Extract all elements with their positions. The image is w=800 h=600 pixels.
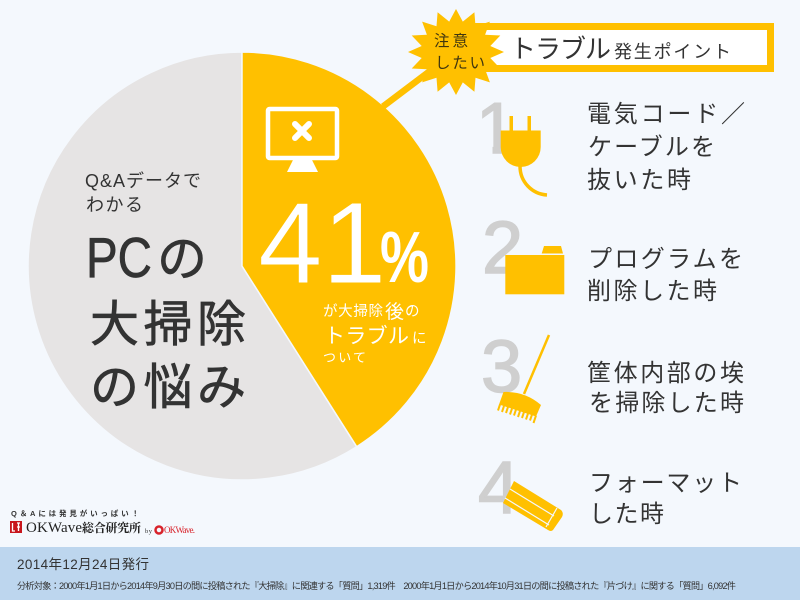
- item 3 label: を掃除した時: [589, 390, 744, 417]
- pie title: main heading: [86, 226, 246, 415]
- item 3 label: 筐体内部の埃: [587, 360, 744, 387]
- badge: starburst: 注意: [434, 32, 468, 50]
- item 4 label: [589, 470, 742, 528]
- icon: disc cleaner: [503, 481, 563, 531]
- icon: broom: [498, 335, 549, 423]
- number 4: 4: [478, 446, 519, 529]
- item 1: [476, 89, 745, 195]
- slice caption: [323, 301, 426, 365]
- item 1 label: [587, 101, 745, 194]
- slice caption: 後: [385, 301, 404, 323]
- pie title: main heading: の悩み: [90, 361, 246, 415]
- icon: folder: [505, 246, 564, 294]
- logo wordmark kanji: 総合研究所: [82, 519, 141, 536]
- number 2: 2: [482, 206, 523, 289]
- pie title: main heading: PC: [86, 226, 152, 290]
- pie title: small lead: Q&Aデータで: [85, 171, 201, 191]
- item 2 label: プログラムを: [588, 246, 743, 273]
- item 1 label: 電気コード／: [587, 101, 745, 128]
- item 2: [482, 206, 743, 305]
- slice caption: が大掃除: [323, 302, 384, 320]
- number 1: 1: [476, 89, 516, 169]
- slice caption: に: [412, 331, 426, 347]
- analysis note: 分析対象：2000年1月1日から2014年9月30日の間に投稿された『大掃除』に関連する「質問」1,319件 2000年1月1日から2014年10月31日の間に投稿された『片づけ』に関する「質問」6,092件: [17, 580, 736, 591]
- item 2 label: 削除した時: [587, 278, 717, 305]
- heading box: 発生ポイント: [614, 42, 731, 62]
- logo: [10, 508, 195, 536]
- number 3: 3: [481, 325, 522, 408]
- big percentage: 1: [322, 178, 387, 308]
- logo small wordmark: OKWave.: [164, 525, 195, 535]
- icon: plug: [501, 116, 547, 195]
- item 4 label: フォーマット: [589, 470, 742, 497]
- footer band: [0, 547, 800, 600]
- slice caption: の: [405, 304, 420, 320]
- connector from pie to badge: [383, 71, 430, 106]
- pie title: main heading: 大掃除: [90, 298, 246, 352]
- item 1 label: ケーブルを: [588, 134, 715, 161]
- logo mark small: [156, 526, 162, 534]
- pie slice: other 59%: [28, 52, 357, 480]
- heading box: [470, 26, 770, 68]
- badge: starburst: したい: [435, 54, 485, 72]
- pie title: small lead: [85, 171, 201, 215]
- item 4 label: した時: [589, 501, 664, 528]
- logo wordmark: OKWave: [26, 520, 82, 536]
- icon: monitor with x: [268, 109, 337, 172]
- big percentage: 4: [258, 178, 323, 308]
- item 3: [481, 325, 744, 423]
- logo mark: [10, 521, 22, 533]
- pie title: small lead: わかる: [86, 195, 143, 215]
- slice caption: ついて: [323, 350, 366, 365]
- publication date: 2014年12月24日発行: [17, 557, 149, 572]
- big percentage: %: [380, 218, 429, 298]
- pie slice: 41%: [242, 52, 456, 447]
- item 3 label: [587, 360, 744, 417]
- pie title: main heading: の: [157, 231, 207, 287]
- item 4: [478, 446, 742, 531]
- badge: starburst: [408, 9, 504, 95]
- slice caption: トラブル: [324, 325, 409, 348]
- big percentage: [258, 178, 429, 308]
- logo tagline: Q＆Aには発見がいっぱい！: [11, 508, 139, 518]
- item 2 label: [587, 246, 743, 305]
- heading box: トラブル: [510, 34, 611, 64]
- item 1 label: 抜いた時: [587, 167, 691, 194]
- pie chart: [28, 52, 456, 480]
- logo by: by: [145, 528, 153, 535]
